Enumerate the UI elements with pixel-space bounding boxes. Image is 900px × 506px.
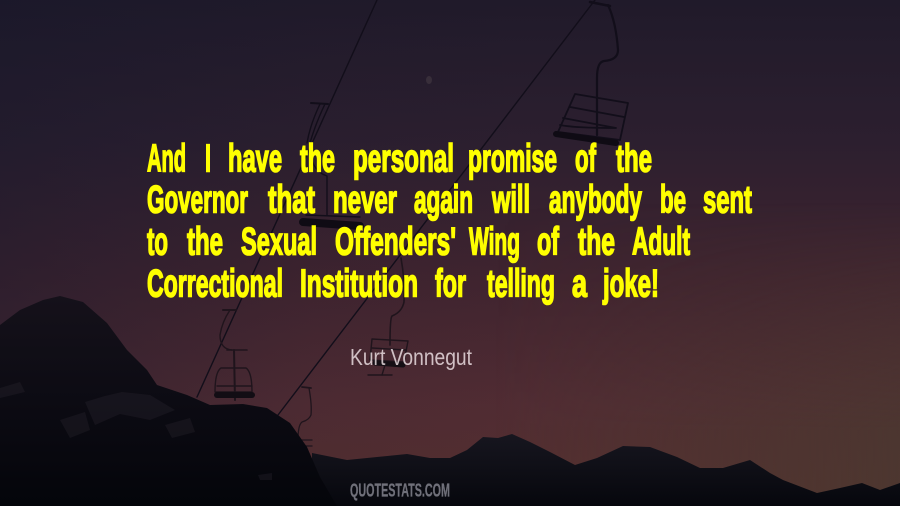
quote line 3 xyxy=(147,220,690,264)
watermark: QUOTESTATS.COM xyxy=(350,480,450,500)
far mountain ridge xyxy=(312,434,900,506)
quote text xyxy=(147,138,752,306)
quote line 2: that xyxy=(268,178,315,222)
quote line 1: I xyxy=(205,138,211,180)
quote line 2: never xyxy=(333,178,397,222)
quote line 3: Offenders' xyxy=(335,220,456,264)
quote line 2: Governor xyxy=(147,178,248,222)
quote line 2: will xyxy=(491,178,530,222)
quote line 1: And xyxy=(147,138,186,180)
quote line 1: the xyxy=(616,138,652,180)
quote line 2: be xyxy=(660,178,686,222)
quote line 1: have xyxy=(228,138,282,180)
chairlift cables and chairs xyxy=(197,0,628,446)
snow patches xyxy=(0,382,272,480)
quote line 1 xyxy=(147,138,652,180)
quote line 3: of xyxy=(537,220,559,264)
quote line 2: anybody xyxy=(549,178,642,222)
quote line 1: the xyxy=(300,138,335,180)
quote line 2: again xyxy=(414,178,473,222)
near left mountain xyxy=(0,296,337,506)
chair: behind quote xyxy=(303,103,360,226)
chair: small lower xyxy=(298,387,312,446)
quote line 4 xyxy=(147,262,659,306)
quote line 4: Institution xyxy=(300,262,418,306)
quote line 2 xyxy=(147,178,752,222)
chair: behind author xyxy=(368,258,408,375)
chair: upper right xyxy=(556,2,628,143)
quote line 4: for xyxy=(435,262,466,306)
quote line 1: of xyxy=(575,138,596,180)
quote line 3: the xyxy=(578,220,615,264)
quote line 1: personal xyxy=(353,138,454,180)
quote line 3: Adult xyxy=(632,220,690,264)
quote line 2: sent xyxy=(703,178,752,222)
quote line 3: Sexual xyxy=(241,220,317,264)
chair: lower left xyxy=(215,310,252,400)
quote line 4: a xyxy=(572,262,587,306)
quote line 4: telling xyxy=(487,262,555,306)
quote line 3: the xyxy=(187,220,223,264)
quote line 1: promise xyxy=(468,138,557,180)
quote line 3: Wing xyxy=(469,220,520,264)
quote line 4: joke! xyxy=(602,262,659,306)
quote line 3: to xyxy=(147,220,168,264)
quote line 4: Correctional xyxy=(147,262,283,306)
author name: Kurt Vonnegut xyxy=(350,344,472,370)
